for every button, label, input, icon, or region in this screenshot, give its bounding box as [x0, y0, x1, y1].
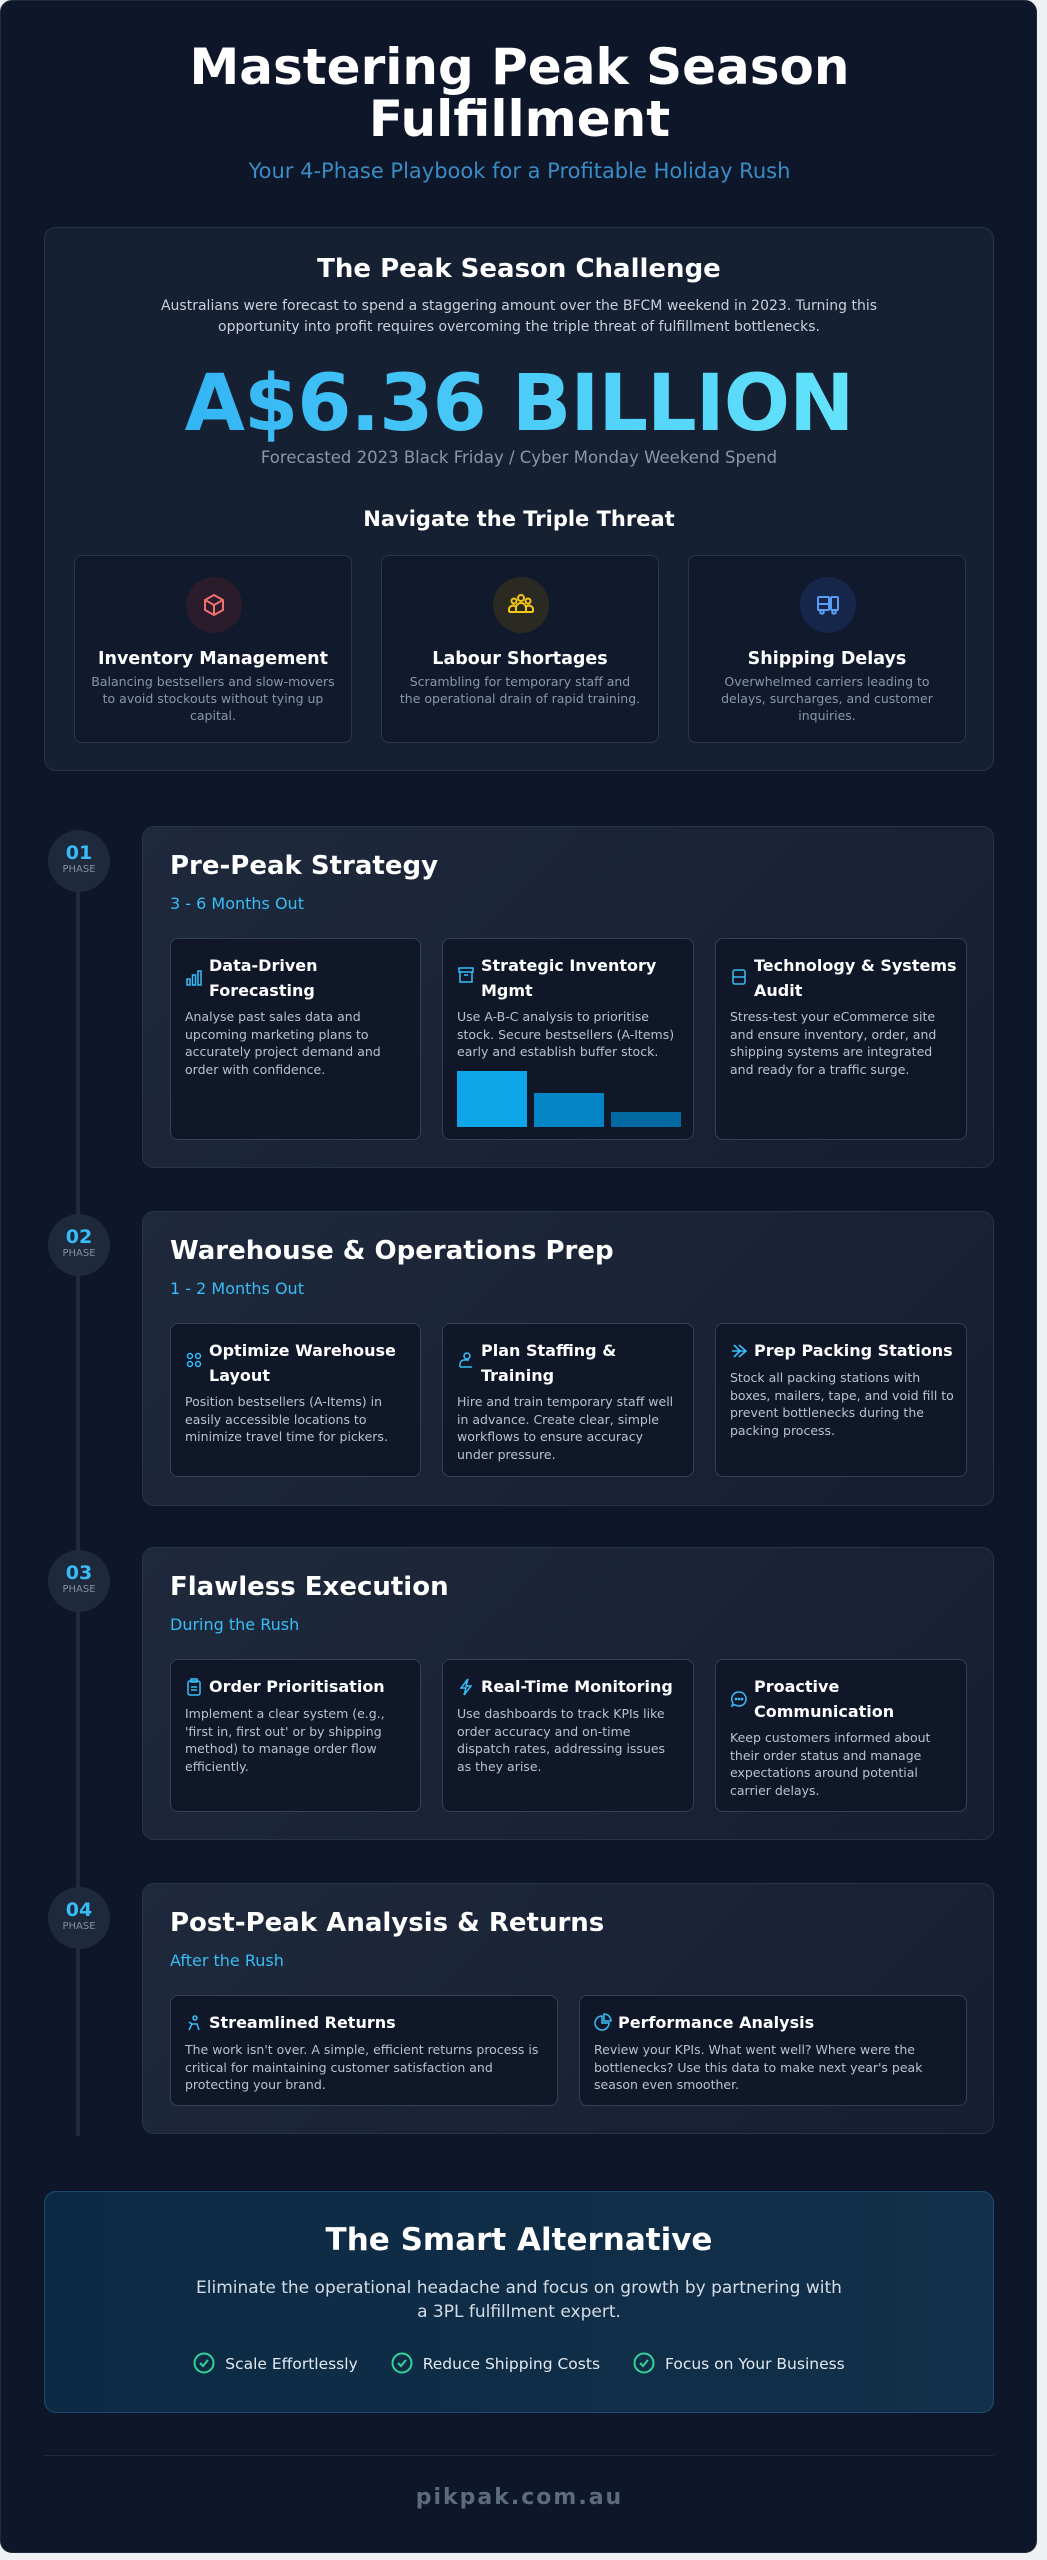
panel: phase 1: 3 - 6 Months Out	[170, 894, 304, 913]
phase marker 01: PHASE	[62, 864, 96, 875]
phase marker 02: 02	[66, 1226, 92, 1248]
card: returns: The work isn't over. A simple, efficient returns process is critical for maintaining customer satisfaction and protecting your brand.	[185, 2042, 538, 2092]
panel: smart alternative	[44, 2191, 994, 2413]
icon: bolt	[460, 1678, 472, 1696]
title	[190, 38, 850, 148]
icon: chart	[186, 970, 202, 986]
card: inventory: capital.	[190, 708, 236, 723]
panel: phase 3: During the Rush	[170, 1615, 299, 1634]
phase marker 03: 03	[66, 1562, 92, 1584]
timeline line	[76, 881, 80, 2136]
card: order prioritisation: Order Prioritisation	[209, 1677, 385, 1696]
card: performance	[579, 1995, 967, 2106]
panel: phase 2: Warehouse & Operations Prep	[170, 1236, 614, 1266]
card: monitoring	[442, 1659, 694, 1812]
challenge heading: The Peak Season Challenge	[317, 254, 721, 284]
card: inventory mgmt: Strategic Inventory Mgmt	[481, 956, 656, 1000]
card: inventory mgmt: Use A-B-C analysis to prioritise stock. Secure bestsellers (A-Items) early and establish buffer stock.	[457, 1009, 674, 1059]
cta text: a 3PL fulfillment expert.	[417, 2302, 621, 2322]
card: labour: the operational drain of rapid training.	[400, 691, 640, 706]
card: tech audit	[715, 938, 967, 1140]
card: labour: Scrambling for temporary staff and	[410, 674, 630, 689]
card: tech audit: Stress-test your eCommerce site and ensure inventory, order, and shipping systems are integrated and ready for a traffic surge.	[730, 1009, 936, 1076]
card: monitoring: Real-Time Monitoring	[481, 1677, 673, 1696]
card: returns	[170, 1995, 558, 2106]
stat caption: Forecasted 2023 Black Friday / Cyber Monday Weekend Spend	[261, 448, 777, 467]
panel: challenge	[44, 227, 994, 771]
panel: phase 3	[142, 1547, 994, 1840]
card: layout: Optimize Warehouse Layout	[209, 1341, 396, 1385]
benefits list: Reduce Shipping Costs	[423, 2355, 600, 2373]
card: staffing: Plan Staffing &	[481, 1341, 616, 1360]
card: shipping	[688, 555, 966, 743]
big stat: A$6.36 BILLION	[185, 359, 853, 449]
card: staffing: Hire and train temporary staff well in advance. Create clear, simple workflows to ensure accuracy under pressure.	[457, 1394, 673, 1462]
card: labour: Labour Shortages	[432, 649, 608, 669]
triple threat heading: Navigate the Triple Threat	[363, 507, 675, 531]
card: packing: Stock all packing stations with boxes, mailers, tape, and void fill to prevent bottlenecks during the packing process.	[730, 1370, 954, 1438]
card: packing	[715, 1323, 967, 1477]
title: Mastering Peak Season	[190, 38, 850, 96]
icon: server	[732, 969, 746, 985]
card: forecasting: Data-Driven Forecasting	[209, 956, 318, 1000]
card: shipping: Shipping Delays	[748, 649, 906, 669]
benefits list: Scale Effortlessly	[225, 2355, 358, 2373]
card: tech audit: Technology & Systems	[754, 956, 957, 975]
card: forecasting	[170, 938, 421, 1140]
card: staffing	[442, 1323, 694, 1477]
card: inventory	[74, 555, 352, 743]
benefits list: Focus on Your Business	[665, 2355, 845, 2373]
card: tech audit: Audit	[754, 981, 802, 1000]
card: communication: Keep customers informed about their order status and manage expectations around potential carrier delays.	[730, 1730, 930, 1798]
card: labour	[381, 555, 659, 743]
icon: people	[493, 577, 549, 633]
card: returns: Streamlined Returns	[209, 2013, 396, 2032]
icon: arrows	[732, 1344, 748, 1358]
benefits list	[194, 2352, 845, 2374]
card: inventory mgmt	[442, 938, 694, 1140]
phase marker 03	[48, 1550, 110, 1612]
panel: phase 4	[142, 1883, 994, 2134]
phase marker 04	[48, 1887, 110, 1949]
panel: phase 4: After the Rush	[170, 1951, 284, 1970]
phase marker 01	[48, 830, 110, 892]
phase marker 03: PHASE	[62, 1584, 96, 1595]
icon: archive	[458, 967, 474, 983]
card: order prioritisation	[170, 1659, 421, 1812]
card: shipping: Overwhelmed carriers leading to delays, surcharges, and customer inquiries.	[721, 674, 933, 723]
card: layout	[170, 1323, 421, 1477]
panel: phase 2: 1 - 2 Months Out	[170, 1279, 304, 1298]
icon: return	[188, 2015, 200, 2030]
icon: clipboard	[187, 1678, 201, 1696]
card: staffing: Training	[481, 1366, 554, 1385]
cta text	[196, 2278, 842, 2322]
icon: box	[186, 577, 242, 633]
cta text: Eliminate the operational headache and focus on growth by partnering with	[196, 2278, 842, 2298]
icon: chat	[730, 1691, 747, 1708]
challenge text: Australians were forecast to spend a staggering amount over the BFCM weekend in 2023. Turning this opportunity into profit requires overcoming the triple threat of fulfillment bottlenecks.	[161, 298, 877, 335]
phase marker 01: 01	[66, 842, 92, 864]
icon: truck	[800, 577, 856, 633]
phase marker 04: 04	[66, 1899, 92, 1921]
footer: pikpak.com.au	[416, 2485, 623, 2510]
card: packing: Prep Packing Stations	[754, 1341, 953, 1360]
card: forecasting: Analyse past sales data and upcoming marketing plans to accurately project demand and order with confidence.	[185, 1009, 381, 1076]
card: layout: Position bestsellers (A-Items) in easily accessible locations to minimize travel time for pickers.	[185, 1394, 388, 1444]
card: performance: Performance Analysis	[618, 2013, 814, 2032]
phase marker 04: PHASE	[62, 1921, 96, 1932]
card: inventory: Inventory Management	[98, 649, 328, 669]
card: order prioritisation: Implement a clear system (e.g., 'first in, first out' or by shipping method) to manage order flow efficiently.	[185, 1706, 385, 1774]
title: Fulfillment	[369, 90, 670, 148]
card: inventory: Balancing bestsellers and slow-movers	[91, 674, 335, 689]
phase marker 02: PHASE	[62, 1248, 96, 1259]
panel: phase 3: Flawless Execution	[170, 1572, 449, 1602]
subtitle: Your 4-Phase Playbook for a Profitable Holiday Rush	[249, 159, 790, 183]
icon: pie	[594, 2013, 612, 2031]
card: communication: Proactive Communication	[754, 1677, 894, 1721]
card: monitoring: Use dashboards to track KPIs like order accuracy and on-time dispatch rates, addressing issues as they arise.	[457, 1706, 665, 1774]
cta heading: The Smart Alternative	[326, 2222, 712, 2258]
icon: grid	[186, 1352, 202, 1368]
panel: phase 1	[142, 826, 994, 1168]
panel: phase 1: Pre-Peak Strategy	[170, 851, 438, 881]
bar chart: ABC	[457, 1071, 681, 1127]
card: performance: Review your KPIs. What went well? Where were the bottlenecks? Use this data to make next year's peak season even smoother.	[594, 2042, 922, 2092]
card: inventory: to avoid stockouts without tying up	[103, 691, 323, 706]
phase marker 02	[48, 1214, 110, 1276]
panel: phase 2	[142, 1211, 994, 1506]
card: communication	[715, 1659, 967, 1812]
icon: user	[459, 1352, 472, 1368]
panel: phase 4: Post-Peak Analysis & Returns	[170, 1908, 604, 1938]
